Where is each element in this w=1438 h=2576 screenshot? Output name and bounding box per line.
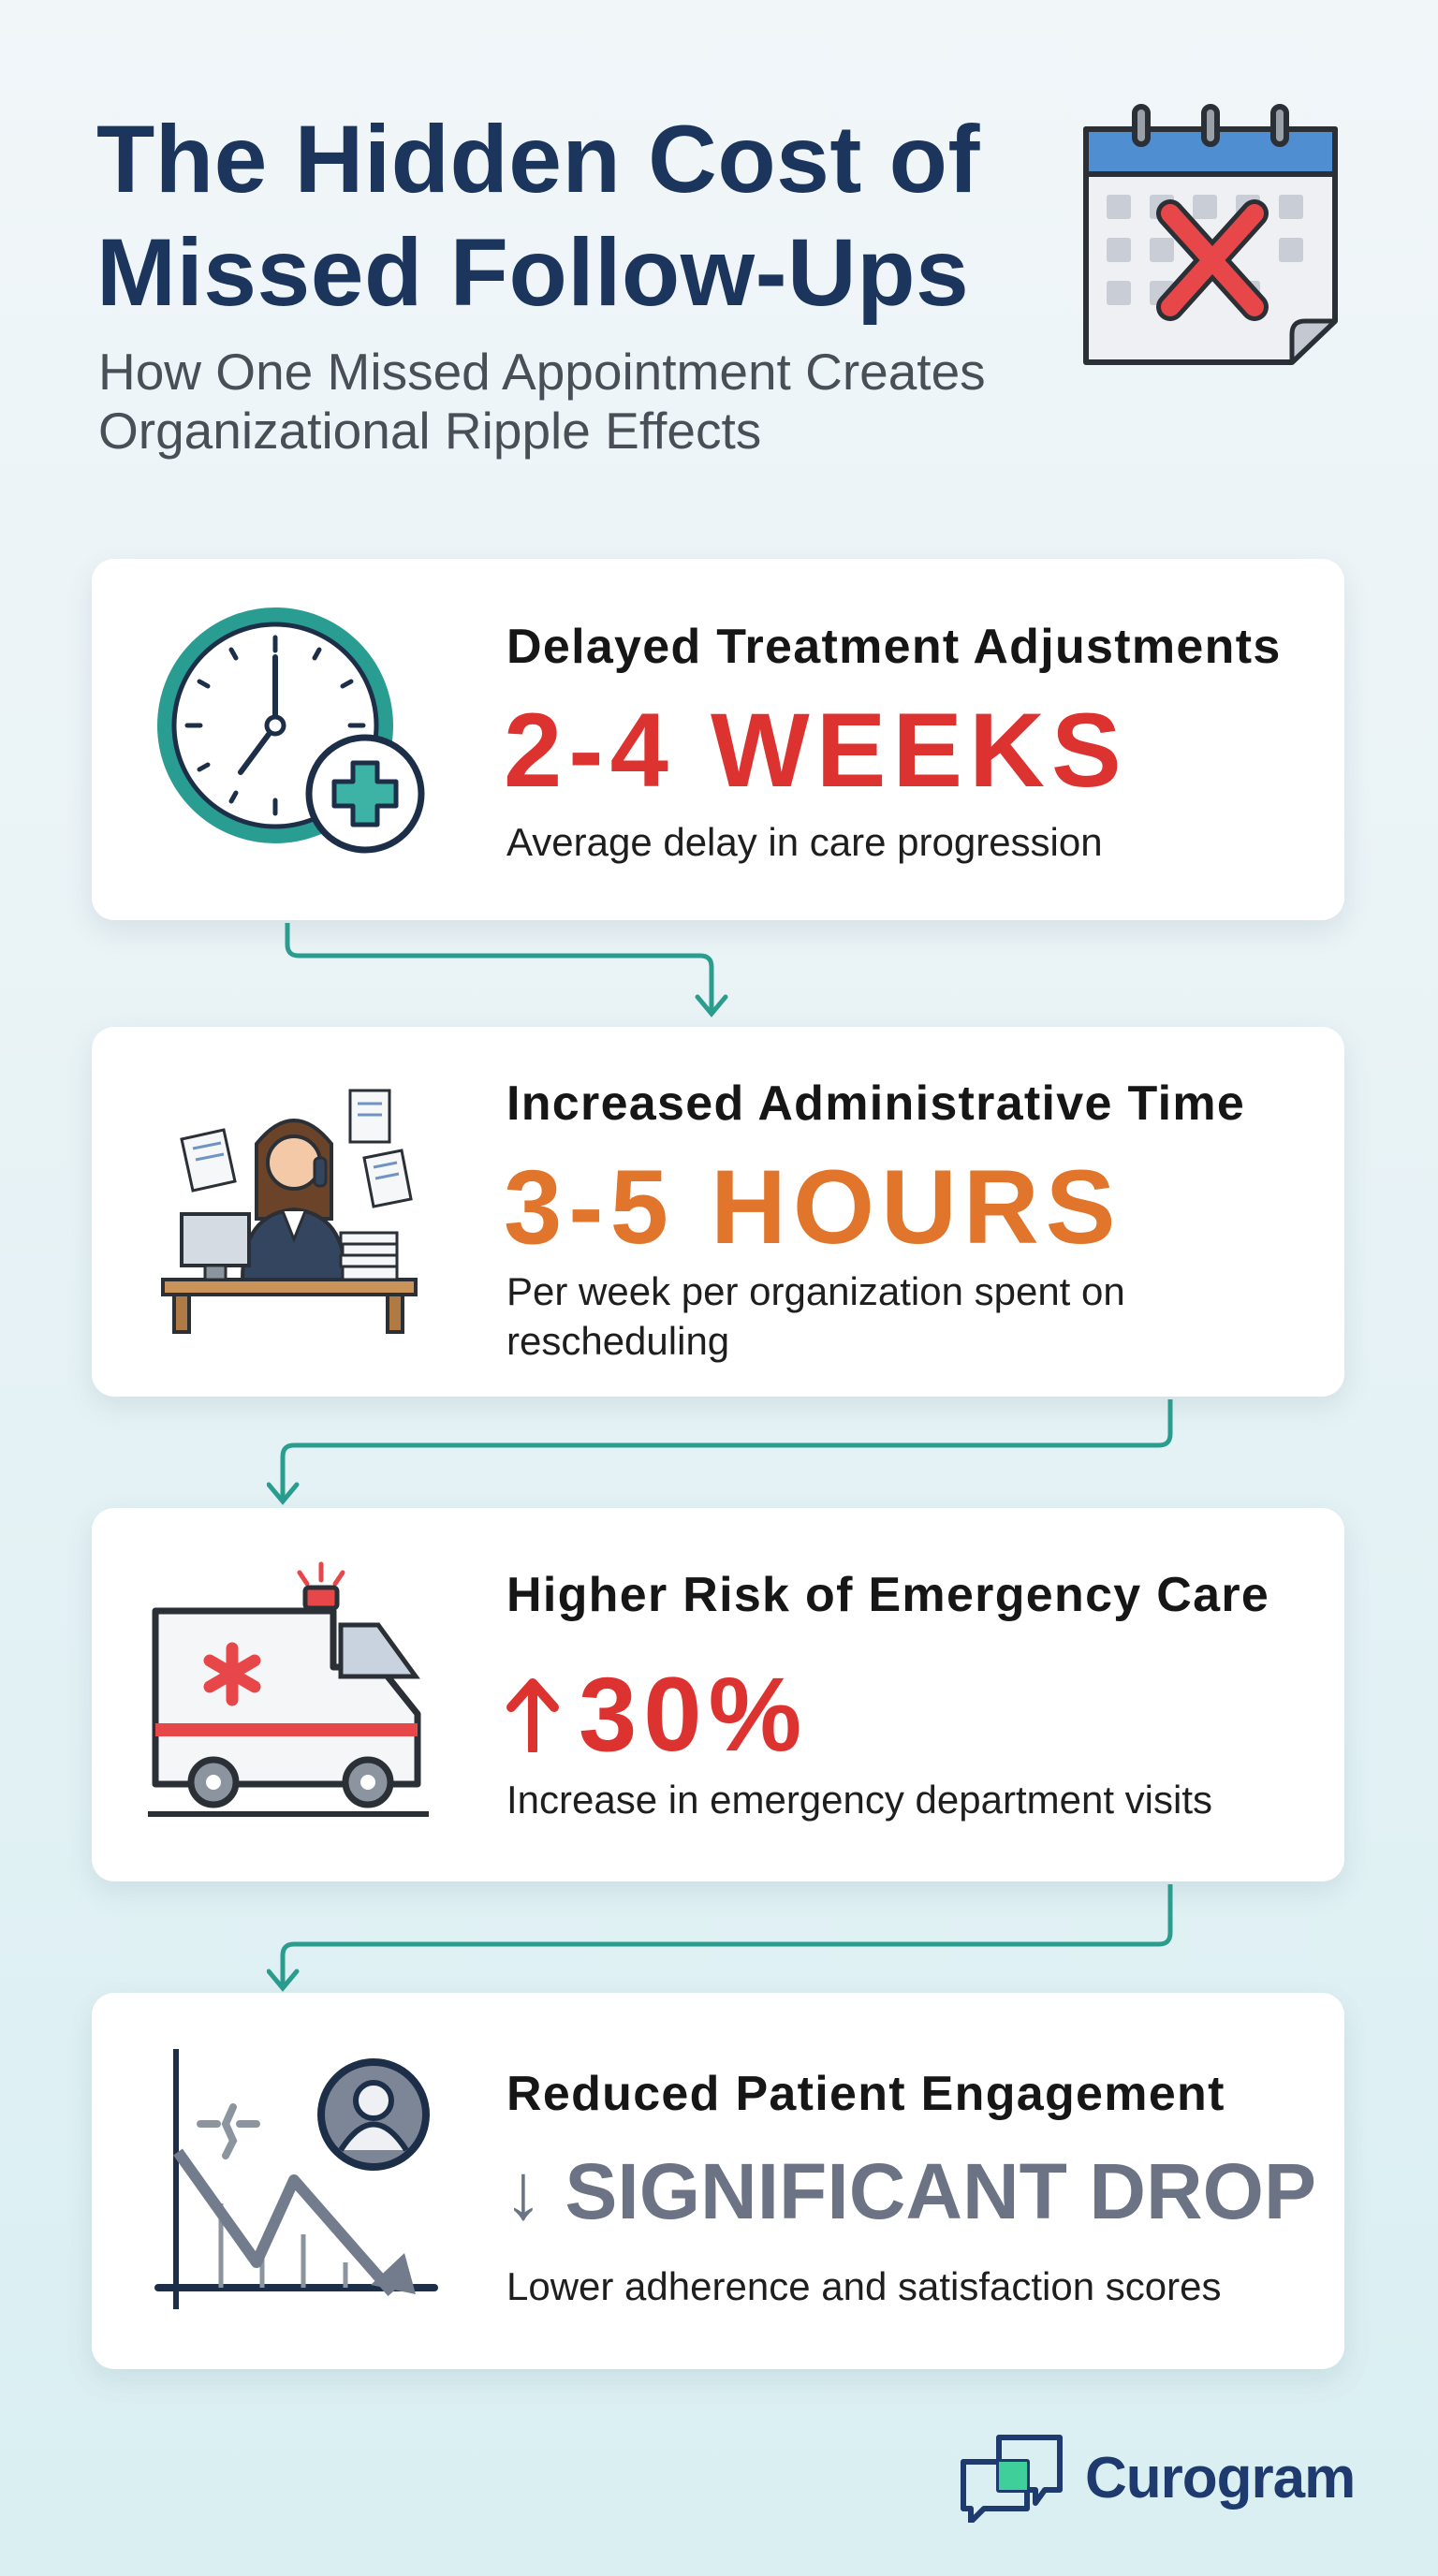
heading: Higher Risk of Emergency Care (506, 1568, 1269, 1622)
panel: emergency care (92, 1508, 1344, 1881)
subtitle (98, 343, 986, 460)
stat: 3-5 hours: 3-5 HOURS (504, 1149, 1122, 1266)
arrow: connector 3 (267, 1884, 1172, 1992)
description: Average delay in care progression (506, 820, 1103, 864)
brand name: Curogram (1085, 2446, 1355, 2510)
title: The Hidden Cost of (96, 106, 980, 212)
description: Per week per organization spent on (506, 1269, 1125, 1313)
stat: 2-4 weeks: 2-4 WEEKS (504, 692, 1128, 809)
logo: Curogram (961, 2435, 1355, 2523)
description: Increase in emergency department visits (506, 1778, 1212, 1822)
description: Lower adherence and satisfaction scores (506, 2264, 1221, 2308)
icon: chat bubbles (961, 2435, 1063, 2523)
heading: Increased Administrative Time (506, 1076, 1245, 1131)
description: rescheduling (506, 1319, 729, 1363)
subtitle: Organizational Ripple Effects (98, 402, 761, 460)
arrow: connector 1 (285, 923, 728, 1017)
description (506, 1269, 1125, 1363)
panel: patient engagement (92, 1993, 1344, 2369)
icon: declining chart with person (154, 2049, 438, 2309)
icon: clock with plus (157, 607, 425, 854)
title: Missed Follow-Ups (96, 219, 969, 326)
panel: administrative time (92, 1027, 1344, 1397)
title (96, 106, 980, 326)
arrow: connector 2 (267, 1399, 1172, 1505)
stat: up 30%: 30% (579, 1656, 808, 1773)
heading: Delayed Treatment Adjustments (506, 620, 1282, 674)
heading: Reduced Patient Engagement (506, 2067, 1225, 2121)
icon: calendar with X (1083, 104, 1338, 365)
panel: delayed treatment (92, 559, 1344, 920)
subtitle: How One Missed Appointment Creates (98, 343, 986, 401)
stat: significant drop: ↓ SIGNIFICANT DROP (504, 2147, 1316, 2235)
icon: office worker (161, 1090, 418, 1334)
icon: ambulance (148, 1561, 429, 1817)
